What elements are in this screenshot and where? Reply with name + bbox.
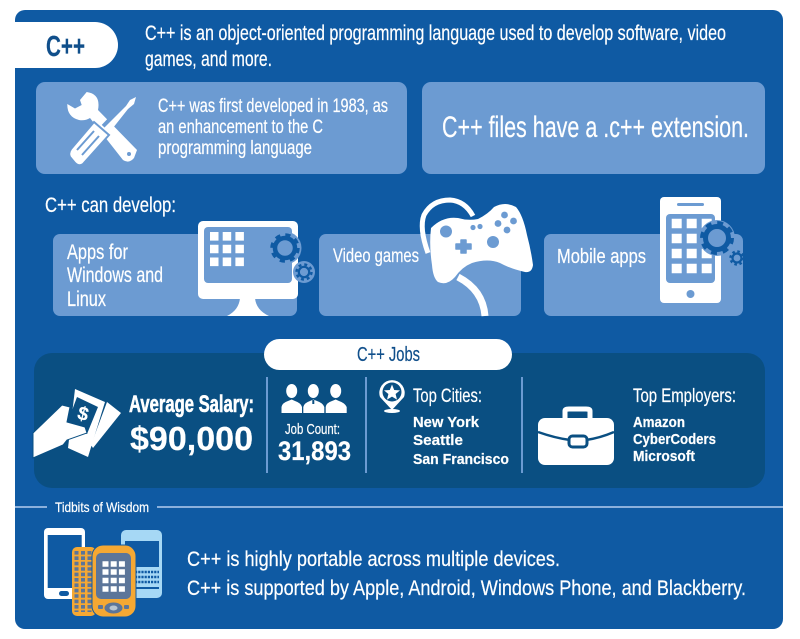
top cities: New York — [413, 414, 480, 431]
card: windows and linux apps: Apps for — [67, 241, 128, 264]
intro text: games, and more. — [145, 48, 272, 71]
top cities: San Francisco — [413, 451, 509, 468]
icon: location pin with star — [379, 380, 405, 413]
section heading: tidbits of wisdom: Tidbits of Wisdom — [55, 499, 149, 515]
jobs heading pill: C++ Jobs — [357, 344, 420, 366]
title pill — [15, 22, 118, 68]
panel: jobs — [33, 339, 765, 488]
card: windows and linux apps: Windows and — [67, 264, 163, 287]
top employers: CyberCoders — [633, 431, 716, 448]
panel: file extension — [422, 82, 765, 174]
top employers — [538, 386, 736, 465]
jobs heading pill — [264, 339, 512, 370]
tidbits text — [187, 547, 746, 600]
top employers: Top Employers: — [633, 386, 736, 407]
top cities — [379, 380, 509, 468]
card: mobile apps — [544, 197, 744, 316]
job count: Job Count: — [285, 421, 340, 438]
icon: hand with money — [33, 389, 121, 458]
panel: history: programming language — [158, 138, 312, 159]
icon: hand with money: $ — [75, 403, 91, 426]
top employers: Microsoft — [633, 448, 695, 465]
job count — [278, 384, 351, 466]
average salary: $90,000 — [130, 420, 253, 457]
icon: game controller — [422, 200, 533, 316]
card: video games: Video games — [333, 246, 419, 267]
card: video games — [319, 200, 533, 316]
panel: history: an enhancement to the C — [158, 117, 323, 138]
icon: wrench and screwdriver — [67, 92, 137, 165]
average salary: Average Salary: — [129, 391, 254, 418]
average salary — [129, 391, 254, 457]
title pill: C++ — [46, 31, 85, 63]
panel: history: C++ was first developed in 1983, as — [158, 96, 388, 117]
icon: three mobile devices — [44, 528, 162, 617]
icon: phone with gears — [660, 197, 744, 303]
intro text — [145, 22, 726, 71]
icon: three people — [282, 384, 347, 413]
heading: can develop: C++ can develop: — [45, 194, 176, 217]
icon: briefcase — [538, 409, 614, 465]
card: windows and linux apps: Linux — [67, 288, 106, 311]
top employers: Amazon — [633, 414, 685, 431]
panel: history — [36, 82, 407, 174]
card: windows and linux apps — [53, 221, 315, 316]
top cities: Top Cities: — [413, 386, 482, 407]
job count: 31,893 — [278, 436, 351, 466]
icon: monitor with gears — [198, 221, 315, 316]
card: mobile apps: Mobile apps — [557, 246, 646, 268]
top cities: Seattle — [413, 432, 463, 449]
tidbits text: C++ is highly portable across multiple devices. — [187, 547, 560, 571]
